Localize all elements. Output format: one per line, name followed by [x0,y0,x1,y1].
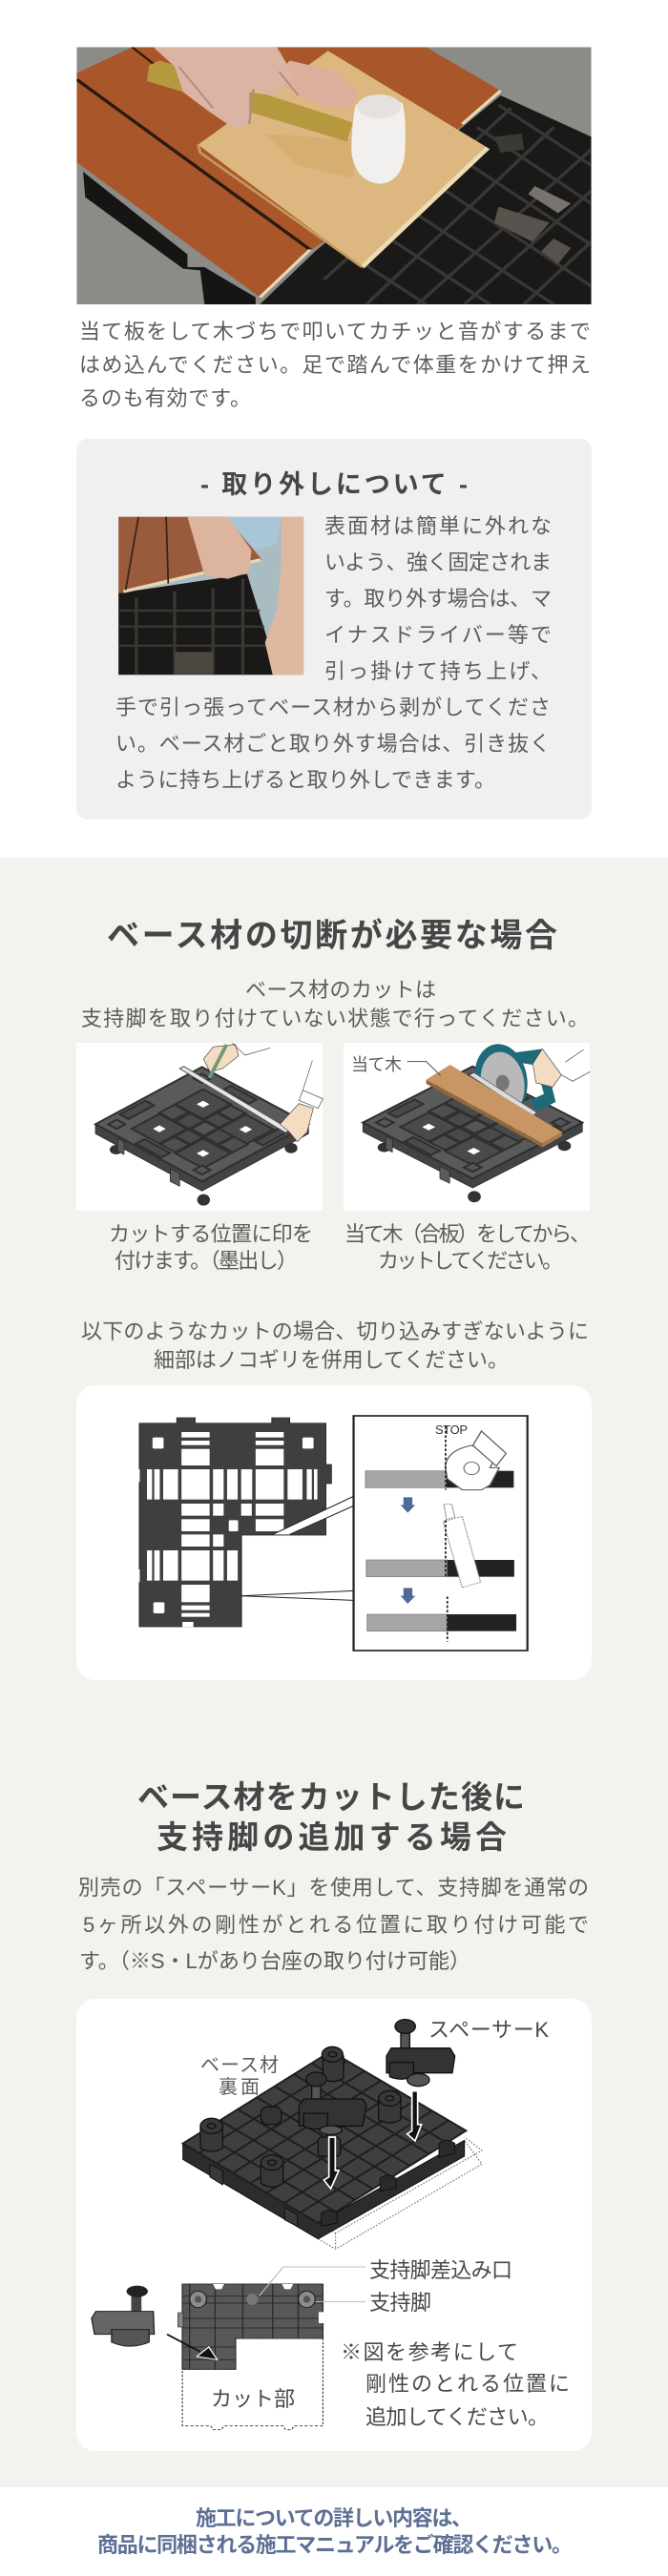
label: base underside [200,2054,279,2098]
plan of cut base [136,1418,331,1627]
label: STOP: STOP [435,1423,468,1437]
caption: marking: カットする位置に印を [109,1222,313,1246]
text: fine cuts note: 細部はノコギリを併用してください。 [154,1348,509,1372]
panel: spacer K diagram [76,1999,592,2451]
removal body text: 引っ掛けて持ち上げ、 [324,659,552,683]
labels: socket, leg, cut part: カット部 [211,2387,295,2411]
spacer side view [92,2286,155,2346]
heading: adding legs after cutting: 支持脚の追加する場合 [157,1819,507,1855]
illustration: cut base with spacer [92,2267,365,2430]
body text: spacer K: す。（※S・Lがあり台座の取り付け可能） [79,1949,470,1973]
labels: socket, leg, cut part: 支持脚差込み口 [369,2258,512,2282]
caption: marking: 付けます。（墨出し） [115,1249,298,1273]
caption: mallet instructions: はめ込んでください。足で踏んで体重をかけて押え [79,353,591,377]
labels: socket, leg, cut part [211,2258,512,2411]
removal body text: い。ベース材ごと取り外す場合は、引き抜く [115,732,551,756]
removal body text: 手で引っ張ってベース材から剥がしてくださ [115,696,551,719]
footer notice: 商品に同梱される施工マニュアルをご確認ください。 [97,2533,573,2557]
arrow to mounting spot [167,2335,218,2359]
leader lines to callout [241,1496,354,1600]
panel: L-shape cut diagram [76,1385,592,1680]
section background: cutting [0,858,668,2487]
caption: mallet instructions: るのも有効です。 [79,386,251,410]
footer notice: 施工についての詳しい内容は、 [196,2506,472,2530]
body text: spacer K [78,1876,589,1973]
insertion arrows [324,2091,422,2189]
label: guide board: 当て木 [351,1055,402,1074]
illustration: cutting with saw and guide board [344,1040,590,1211]
removal body text [115,514,552,792]
note: position reference: 剛性のとれる位置に [365,2372,570,2396]
removal body text: イナスドライバー等で [324,623,552,647]
text: fine cuts note [81,1319,589,1372]
caption: cutting: 当て木（合板）をしてから、 [344,1222,591,1246]
note: position reference [341,2340,570,2429]
label: base underside: 裏面 [219,2076,260,2098]
heading: when cutting is needed: ベース材の切断が必要な場合 [107,917,557,954]
intro text: cutting: 支持脚を取り付けていない状態で行ってください。 [81,1007,589,1030]
caption: mallet instructions [79,320,591,410]
label: spacer K: スペーサーK [428,2018,549,2042]
removal body text: いよう、強く固定されま [324,551,552,574]
heading: adding legs after cutting: ベース材をカットした後に [137,1779,525,1815]
caption: mallet instructions: 当て板をして木づちで叩いてカチッと音がするまで [79,320,591,343]
callout: cutting steps [354,1416,528,1651]
illustration: marking the cut line [76,1043,323,1211]
labels: socket, leg, cut part: 支持脚 [369,2291,431,2315]
caption: marking [109,1222,313,1273]
illustration: base underside with spacers [183,2020,482,2249]
label: base underside: ベース材 [200,2054,279,2076]
footer notice [97,2506,573,2557]
removal body text: す。取り外す場合は、マ [324,587,552,611]
feet [200,2046,401,2187]
heading: adding legs after cutting [137,1779,525,1855]
spacer on base [299,2072,366,2134]
body text: spacer K: 5ヶ所以外の剛性がとれる位置に取り付け可能で [83,1913,589,1937]
text: fine cuts note: 以下のようなカットの場合、切り込みすぎないように [81,1319,589,1343]
intro text: cutting [81,978,589,1030]
caption: cutting [344,1222,591,1273]
removal body text: ように持ち上げると取り外しできます。 [115,768,495,792]
photo: mallet tapping the board [76,47,592,304]
note: position reference: ※図を参考にして [341,2340,518,2364]
spacer above base [386,2020,455,2087]
photo: lifting surface panel [118,517,303,675]
heading: removal: - 取り外しについて - [200,470,468,499]
panel: removal [76,439,592,820]
intro text: cutting: ベース材のカットは [245,978,436,1002]
body text: spacer K: 別売の「スペーサーK」を使用して、支持脚を通常の [78,1876,589,1900]
removal body text: 表面材は簡単に外れな [324,514,552,538]
note: position reference: 追加してください。 [365,2405,549,2429]
caption: cutting: カットしてください。 [378,1249,563,1273]
